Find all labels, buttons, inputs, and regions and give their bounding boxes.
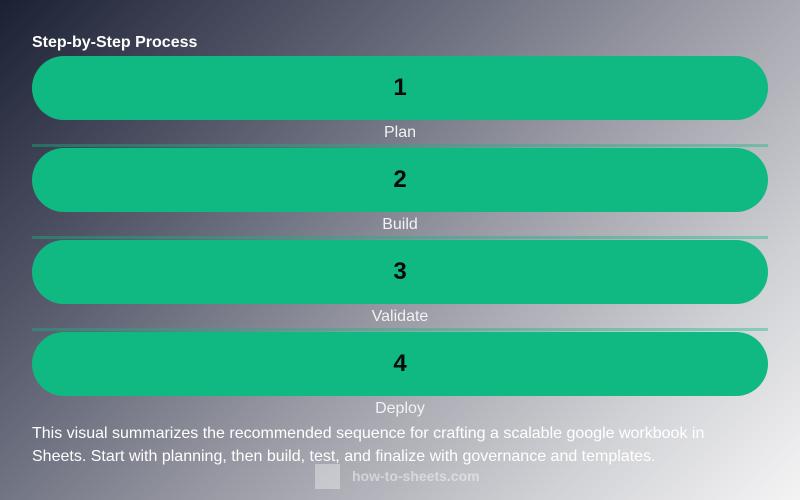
step 2 pill: 2: [393, 166, 407, 193]
step 2 label: Build: [382, 216, 418, 233]
watermark: [315, 464, 480, 489]
watermark text: how-to-sheets.com: [352, 468, 480, 484]
step 3 pill: [32, 240, 768, 304]
step 1 label: Plan: [384, 124, 416, 141]
step 4 pill: [32, 332, 768, 396]
step 2 pill: [32, 148, 768, 212]
step 1 pill: [32, 56, 768, 120]
step 4 label: Deploy: [375, 400, 425, 417]
icon: sheet: [315, 464, 340, 489]
step 4 pill: 4: [393, 350, 407, 377]
step 3 pill: 3: [393, 258, 407, 285]
description text: This visual summarizes the recommended sequence for crafting a scalable google workbook in Sheets. Start with planning, then build, test, and finalize with governance and templates.: [32, 425, 704, 465]
step 1 pill: 1: [393, 74, 407, 101]
step 3 label: Validate: [372, 308, 428, 325]
title: Step-by-Step Process: [32, 34, 197, 51]
